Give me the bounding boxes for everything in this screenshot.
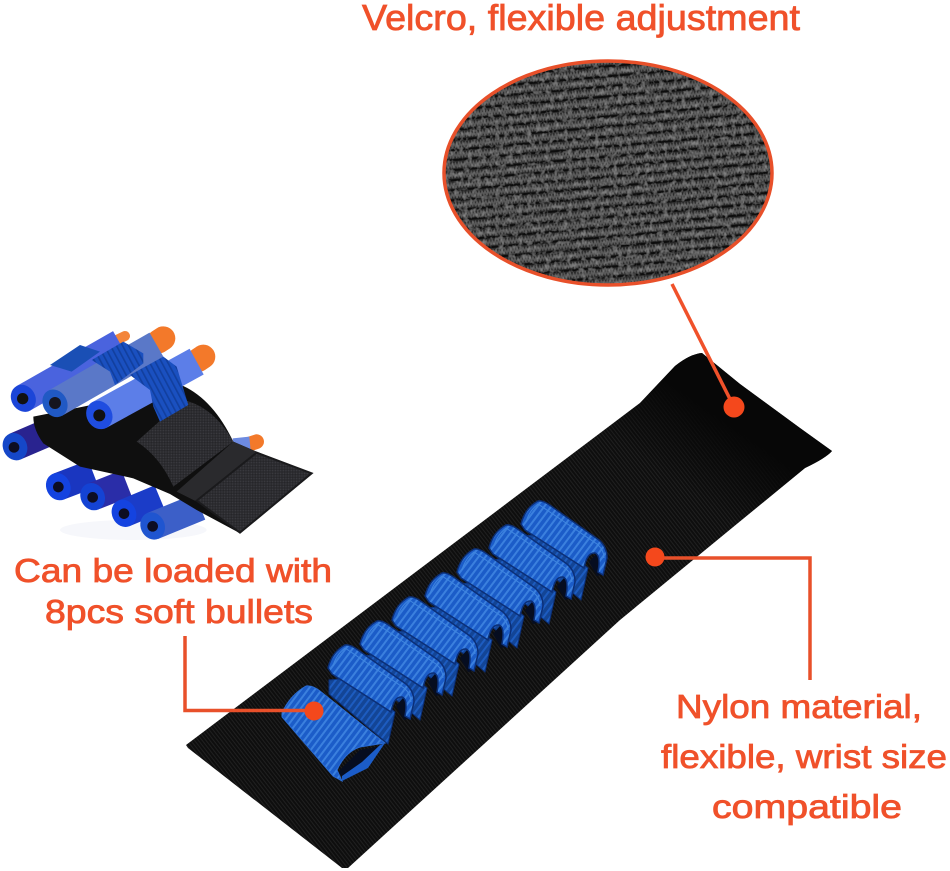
heading: nylon material: compatible [712,788,902,825]
heading: bullets capacity [14,552,332,630]
heading: nylon material: Nylon material, [676,688,922,725]
callout line and dot: velcro [672,284,744,418]
heading: bullets capacity: Can be loaded with [14,552,332,589]
panel: strap with bullet loops [186,353,832,868]
upper darts [6,336,203,434]
heading: bullets capacity: 8pcs soft bullets [45,593,313,630]
bullet loops, seven rear [328,501,607,744]
bullet loop, front [282,686,385,781]
soft shadow [60,520,207,540]
callout line and dot: nylon [646,548,810,680]
strap band [186,353,832,868]
heading: nylon material: flexible, wrist size [661,738,947,775]
lower darts [0,429,257,544]
photo: strap wrapped with darts [0,336,312,544]
panel: velcro close-up magnifier [444,61,772,285]
wrist strap [33,386,312,533]
heading: nylon material [661,688,947,825]
callout line and dot: bullets [185,636,324,720]
elastic bands [50,342,188,422]
